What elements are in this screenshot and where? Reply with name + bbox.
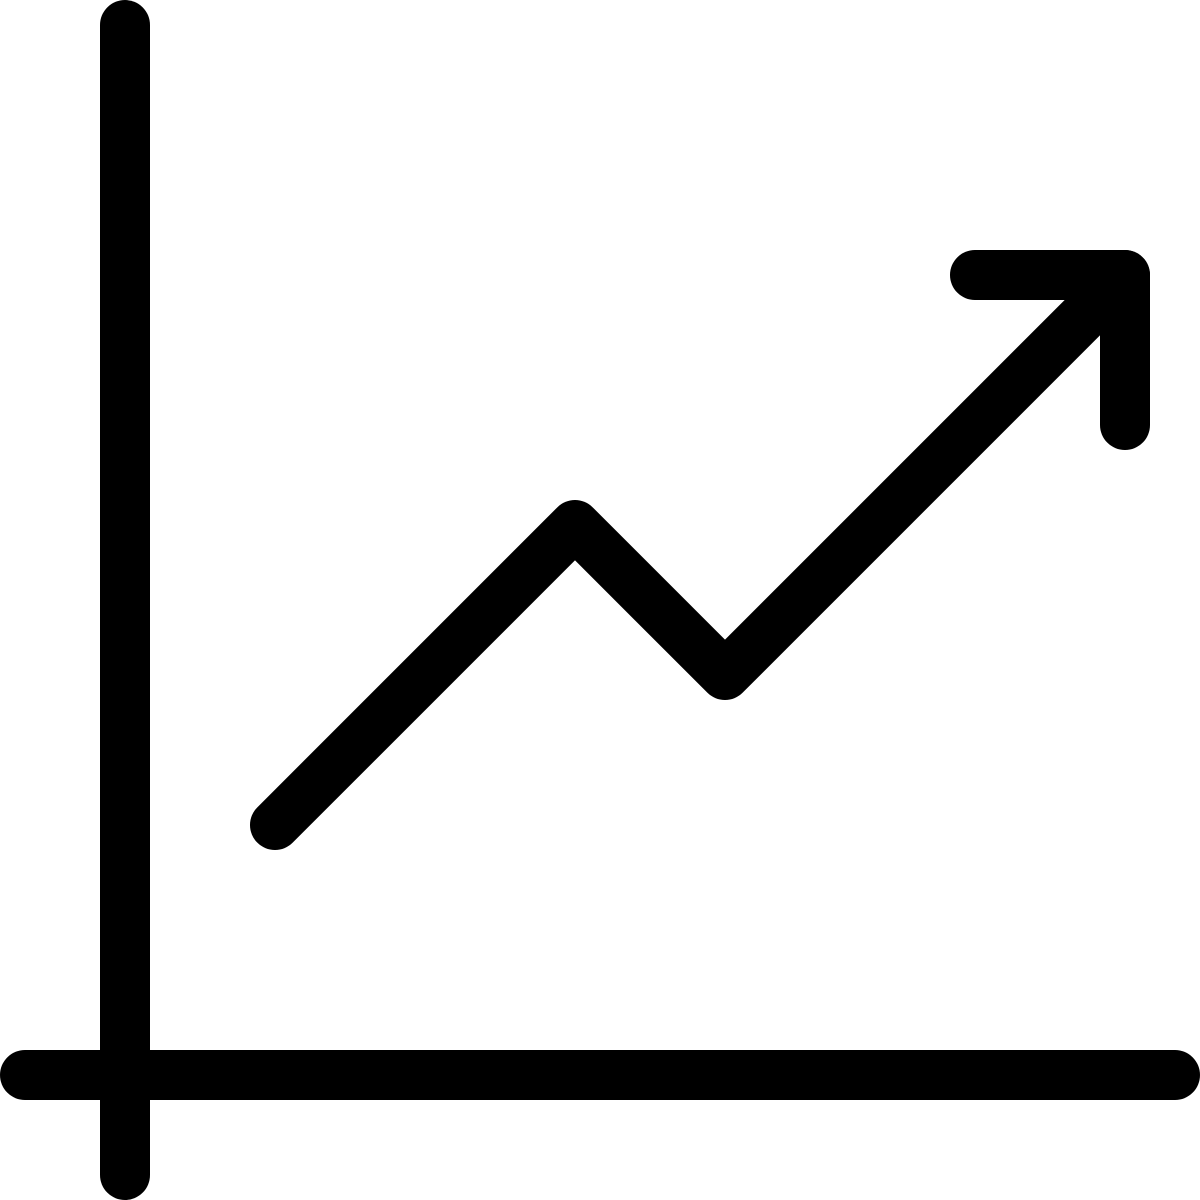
x axis <box>25 1050 1175 1100</box>
trend line <box>275 275 1125 825</box>
arrow head <box>975 275 1125 425</box>
y axis <box>100 25 150 1175</box>
